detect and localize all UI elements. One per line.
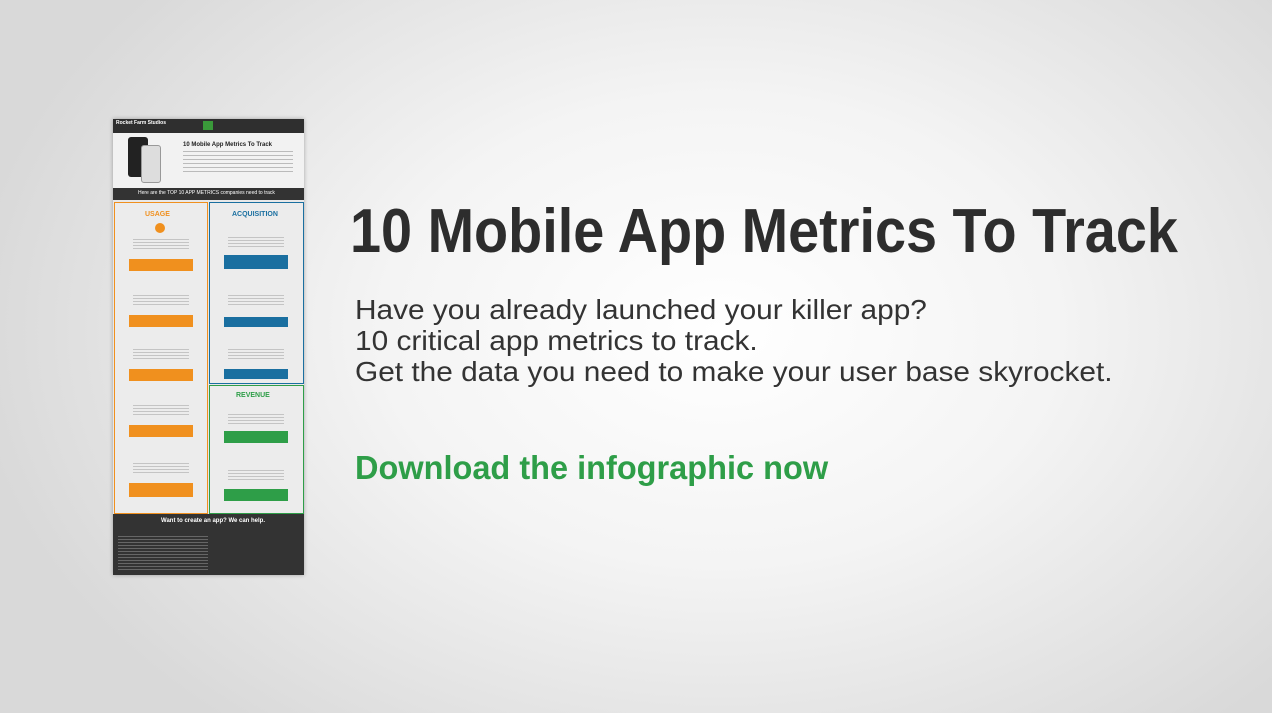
title: 10 Mobile App Metrics To Track [350, 197, 1178, 266]
usage column: USAGE [145, 211, 170, 218]
revenue column [209, 385, 304, 514]
thumb intro [113, 133, 304, 188]
description text: Have you already launched your killer app? [355, 294, 927, 325]
thumb dark bar [113, 188, 304, 200]
phones [128, 137, 148, 177]
usage column [114, 202, 208, 514]
thumb dark bar: Here are the TOP 10 APP METRICS companies need to track [138, 190, 275, 196]
description text: Get the data you need to make your user base skyrocket. [355, 356, 1113, 387]
thumb header bar [113, 119, 304, 133]
description text [355, 294, 1113, 387]
thumb intro: 10 Mobile App Metrics To Track [183, 142, 272, 148]
infographic thumbnail [113, 119, 304, 575]
download call to action: Download the infographic now [355, 449, 828, 486]
thumb header bar: Rocket Farm Studios [116, 120, 166, 126]
acquisition column: ACQUISITION [232, 211, 278, 218]
thumb footer [113, 514, 304, 575]
acquisition column [209, 202, 304, 384]
description text: 10 critical app metrics to track. [355, 325, 758, 356]
revenue column: REVENUE [236, 392, 270, 399]
thumb footer: Want to create an app? We can help. [161, 518, 265, 524]
